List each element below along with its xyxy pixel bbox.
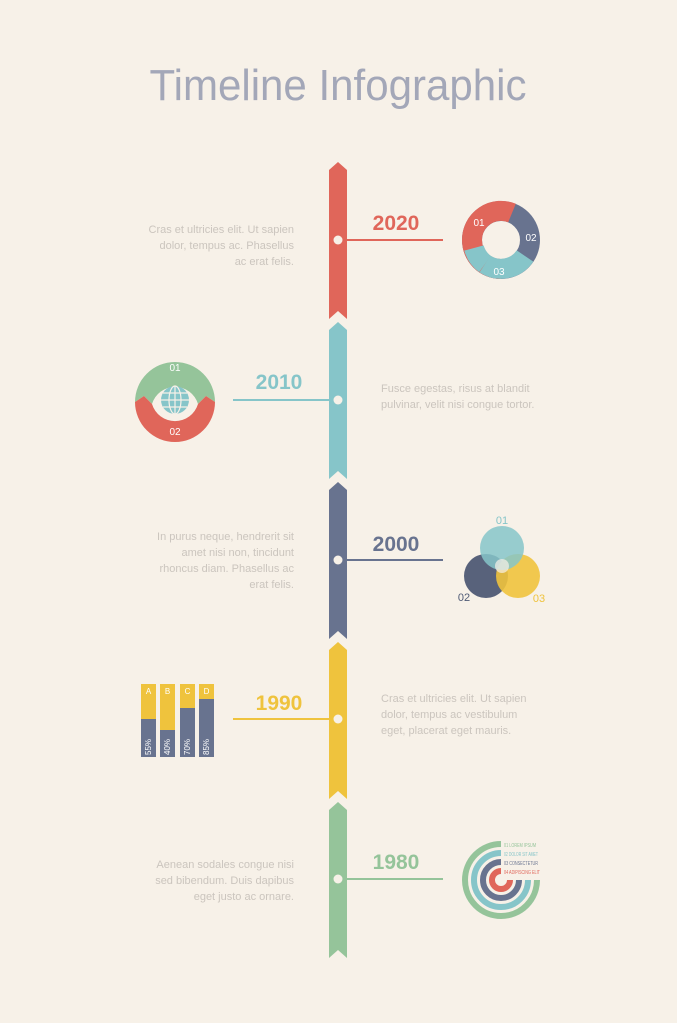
text block 2010 — [381, 383, 534, 411]
text block 2020: dolor, tempus ac. Phasellus — [159, 240, 294, 252]
timeline segment 1980 — [329, 802, 347, 958]
year 2000 with connector: 2000 — [373, 533, 419, 556]
text block 2000: rhoncus diam. Phasellus ac — [159, 563, 294, 575]
timeline segment 2000 — [329, 482, 347, 639]
text block 2010: Fusce egestas, risus at blandit — [381, 383, 530, 395]
year 2020 with connector: 2020 — [373, 212, 419, 235]
icon: radial bars 1980: 03 CONSECTETUR — [504, 861, 538, 867]
bar chart 1990: C — [185, 687, 191, 696]
text block 2000: erat felis. — [249, 579, 294, 591]
year 2010 with connector: 2010 — [256, 371, 302, 394]
bar chart 1990 — [141, 684, 214, 757]
icon: venn 2000: 03 — [533, 593, 545, 605]
icon: donut 2020: 01 — [473, 218, 485, 229]
year 1990 with connector — [233, 692, 329, 719]
icon: donut 2020: 03 — [493, 267, 505, 278]
icon: venn 2000: 02 — [458, 592, 470, 604]
text block 1990: Cras et ultricies elit. Ut sapien — [381, 693, 526, 705]
bar chart 1990: D — [204, 687, 210, 696]
icon: venn 2000: 01 — [496, 515, 508, 527]
bar chart 1990: 70% — [183, 739, 192, 755]
text block 1990: dolor, tempus ac vestibulum — [381, 709, 517, 721]
icon: donut 2020 — [472, 211, 537, 278]
icon: venn 2000 — [458, 515, 545, 605]
text block 2000 — [157, 531, 294, 591]
timeline segment 2020 — [329, 162, 347, 319]
timeline segment 1990 — [329, 642, 347, 799]
icon: radial bars 1980: 01 LOREM IPSUM — [504, 843, 536, 849]
icon: radial bars 1980 — [465, 843, 540, 916]
text block 2010: pulvinar, velit nisi congue tortor. — [381, 399, 534, 411]
year 1980 with connector: 1980 — [373, 851, 419, 874]
icon: donut 2020: 02 — [525, 233, 537, 244]
text block 2000: amet nisi non, tincidunt — [181, 547, 294, 559]
year 1990 with connector: 1990 — [256, 692, 302, 715]
bar chart 1990: 85% — [202, 739, 211, 755]
text block 1980: sed bibendum. Duis dapibus — [155, 875, 294, 887]
bar chart 1990: 55% — [144, 739, 153, 755]
text block 2000: In purus neque, hendrerit sit — [157, 531, 294, 543]
icon: radial bars 1980: 04 ADIPISCING ELIT — [504, 870, 540, 876]
bar chart 1990: A — [146, 687, 152, 696]
text block 1990: eget, placerat eget mauris. — [381, 725, 511, 737]
year 2020 with connector — [347, 212, 443, 240]
year 1980 with connector — [347, 851, 443, 879]
title: Timeline Infographic — [150, 61, 526, 110]
icon: globe cycle 2010: 02 — [169, 427, 181, 438]
text block 2020: ac erat felis. — [235, 256, 294, 268]
year 2000 with connector — [347, 533, 443, 560]
text block 2020: Cras et ultricies elit. Ut sapien — [148, 224, 294, 236]
text block 1980: eget justo ac ornare. — [194, 891, 294, 903]
icon: globe cycle 2010 — [135, 362, 215, 442]
timeline segment 2010 — [329, 322, 347, 479]
bar chart 1990: B — [165, 687, 170, 696]
text block 1980 — [155, 859, 294, 903]
bar chart 1990: 40% — [163, 739, 172, 755]
text block 1980: Aenean sodales congue nisi — [156, 859, 294, 871]
year 2010 with connector — [233, 371, 329, 400]
text block 1990 — [381, 693, 526, 737]
icon: radial bars 1980: 02 DOLOR SIT AMET — [504, 852, 538, 858]
icon: globe cycle 2010: 01 — [169, 363, 181, 374]
text block 2020 — [148, 224, 294, 268]
